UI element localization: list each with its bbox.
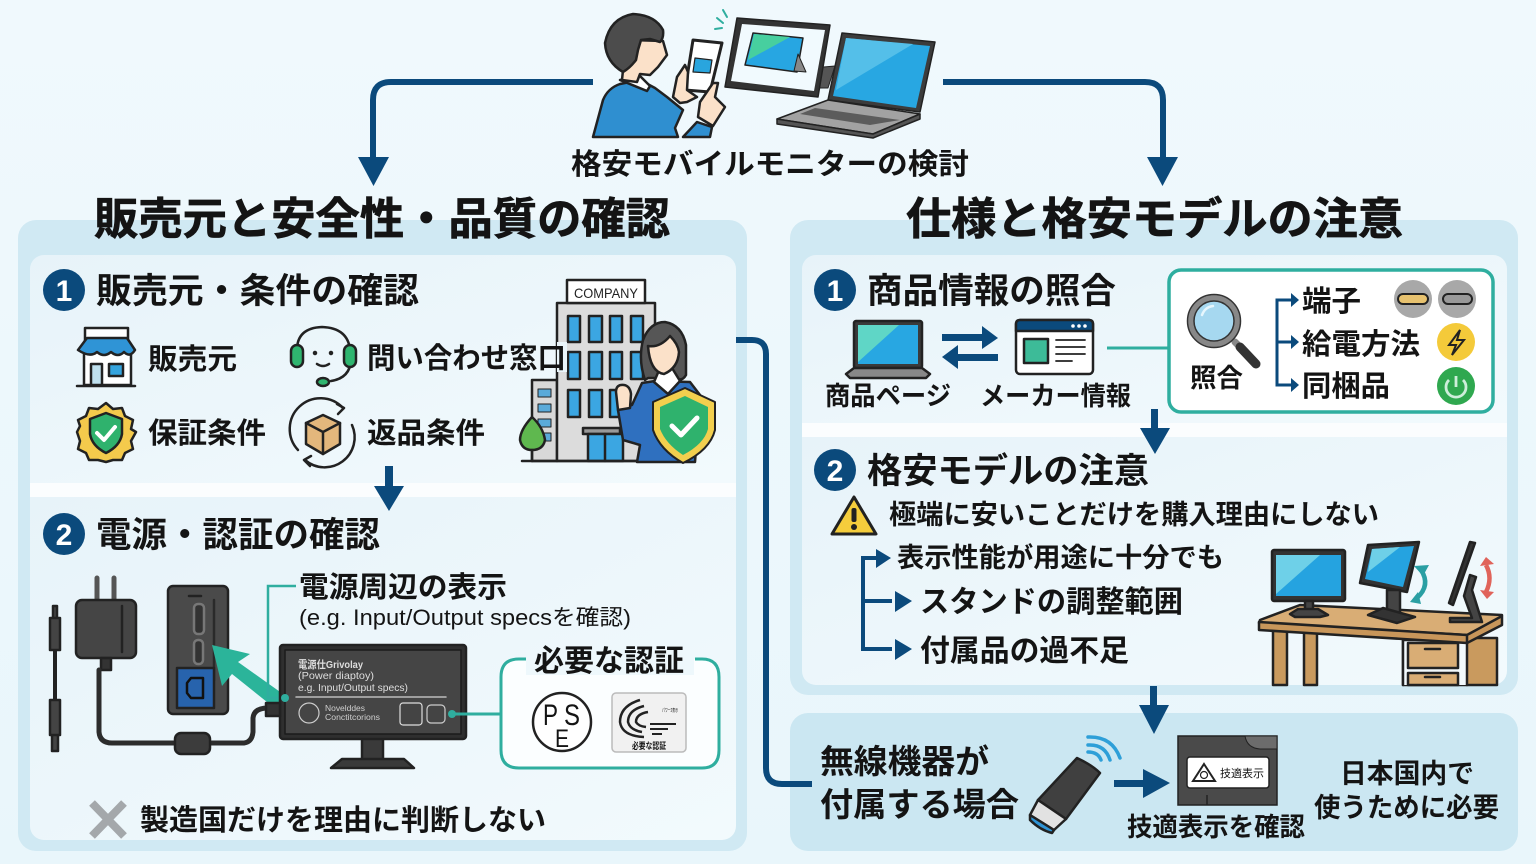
leader: power label: [268, 586, 296, 698]
badge: right 1: [814, 269, 856, 311]
label: product page: 商品ページ: [825, 381, 951, 411]
label: power method: 給電方法: [1302, 328, 1420, 361]
icon: warning: [832, 497, 876, 534]
monitor label text: Novelddes: [325, 703, 365, 713]
label: check: 照合: [1190, 363, 1243, 393]
panel: left outer: [18, 220, 747, 851]
label: 問い合わせ窓口: 問い合わせ窓口: [367, 342, 566, 375]
illustration: desk with monitors: [1259, 542, 1502, 685]
icon: PSE mark: [533, 693, 591, 753]
heading: left section: 販売元と安全性・品質の確認: [94, 195, 670, 244]
icon: cross mark: [92, 803, 124, 836]
monitor label text: e.g. Input/Output specs): [298, 682, 408, 694]
icon: giteki label: 技適表示: [1220, 766, 1264, 780]
panel: right step 1: [802, 255, 1507, 423]
illustration: company building: [520, 280, 655, 461]
icon: USB-C port: [1438, 280, 1476, 318]
heading: left step 1: 販売元・条件の確認: [96, 272, 419, 311]
label: power display: 電源周辺の表示: [299, 571, 507, 604]
heading: right step 2: 格安モデルの注意: [867, 451, 1149, 491]
label: with wireless: [820, 743, 1019, 823]
label: with wireless: 付属する場合: [820, 786, 1019, 823]
note: manufacturing country: 製造国だけを理由に判断しない: [140, 804, 546, 837]
illustration: monitor ports: [168, 586, 228, 714]
arrow: right step 1 to 2: [1140, 409, 1170, 454]
label: with wireless: 無線機器が: [820, 743, 989, 780]
panel: wireless devices: [790, 713, 1518, 851]
panel: right outer: [790, 220, 1518, 695]
arrow: left step 1 to 2: [374, 466, 404, 511]
badge: left 2: 2: [56, 519, 72, 552]
badge: left 2: [43, 513, 85, 555]
icon: PSE mark: S: [564, 699, 580, 732]
heading: certification: 必要な認証: [534, 645, 684, 678]
icon: returns box: [290, 398, 355, 467]
note: accessories: 付属品の過不足: [920, 635, 1129, 668]
icon: shop: [77, 328, 135, 386]
note: cheap warning: 極端に安いことだけを購入理由にしない: [889, 500, 1379, 530]
badge: left 1: 1: [56, 275, 72, 308]
icon: lightning: [1437, 323, 1475, 361]
icon: wifi dongle: [1030, 737, 1120, 833]
icon: maker web page: [1016, 320, 1093, 374]
panel: right step 2: [802, 437, 1507, 685]
label: necessary in Japan: 日本国内で: [1340, 759, 1474, 789]
panel: left step 2: [30, 497, 736, 840]
monitor label text: (Power diaptoy): [298, 670, 374, 682]
icon: power: [1437, 367, 1475, 405]
icon: certification mark: [612, 693, 686, 752]
badge: right 2: [814, 449, 856, 491]
arrow: monitor label to port: [212, 645, 283, 710]
label: bundled: 同梱品: [1302, 370, 1390, 403]
divider: left: [30, 483, 736, 497]
icon: laptop: [846, 321, 930, 378]
divider: right: [802, 423, 1507, 437]
badge: right 2: 2: [827, 455, 843, 488]
label: necessary in Japan: 使うために必要: [1314, 793, 1499, 823]
top caption: 格安モバイルモニターの検討: [571, 148, 969, 181]
illustration: person with phone: [593, 10, 727, 137]
monitor label text: Conctitcorions: [325, 712, 380, 722]
illustration: laptop: [777, 33, 935, 138]
label: 保証条件: 保証条件: [148, 417, 266, 450]
icon: PSE mark: P: [543, 699, 558, 732]
heading: right section: 仕様と格安モデルの注意: [906, 195, 1403, 244]
heading: right step 1: 商品情報の照合: [867, 272, 1116, 311]
label: 販売元: 販売元: [148, 343, 237, 376]
label: necessary in Japan: [1314, 759, 1499, 823]
arrow: top to left: [358, 82, 593, 186]
panel: certification: [452, 650, 719, 768]
arrow: tilt teal: [1410, 565, 1429, 604]
label: maker info: メーカー情報: [980, 381, 1131, 411]
bracket arrows: [1277, 293, 1299, 392]
label: spec note: (e.g. Input/Output specsを確認): [299, 605, 631, 630]
illustration: businesswoman with shield: [616, 322, 715, 463]
icon: support headset: [291, 327, 356, 386]
bracket arrows: notes: [863, 549, 912, 660]
connector: to check box: [1107, 346, 1169, 350]
arrow: top to right: [943, 82, 1178, 186]
label: terminal: 端子: [1302, 285, 1361, 318]
panel: check box: [1169, 270, 1493, 412]
note: stand range: スタンドの調整範囲: [920, 586, 1183, 619]
icon: warranty badge: [77, 403, 136, 462]
illustration: company building: COMPANY: [574, 285, 639, 301]
arrows: page and maker: [942, 326, 998, 369]
icon: giteki label: [1178, 736, 1277, 805]
monitor label text: [298, 658, 408, 722]
panel: left step 1: [30, 255, 736, 483]
arrow: right to wireless: [1139, 686, 1169, 734]
leader dots: [281, 694, 456, 718]
illustration: monitor back: [266, 645, 466, 768]
connector: left panel to wireless: [736, 340, 812, 784]
badge: right 1: 1: [827, 275, 843, 308]
note: display performance: 表示性能が用途に十分でも: [897, 542, 1224, 573]
icon: HDMI port: [1394, 280, 1432, 318]
badge: left 1: [43, 269, 85, 311]
arrow: tilt red: [1480, 557, 1494, 599]
illustration: mobile monitor: [725, 18, 835, 97]
icon: certification mark: パワー2表示: [662, 707, 678, 714]
icon: magnifier: [1188, 294, 1256, 364]
label: 返品条件: 返品条件: [367, 417, 485, 450]
illustration: power adapter and cable: [50, 578, 280, 754]
arrow: dongle to mark: [1114, 769, 1170, 798]
heading: left step 2: 電源・認証の確認: [96, 516, 380, 555]
icon: PSE mark: E: [555, 725, 569, 753]
label: check giteki: 技適表示を確認: [1127, 812, 1305, 842]
label backing: [557, 342, 567, 372]
monitor label text: 電源仕Grivolay: [298, 658, 363, 671]
icon: certification mark: 必要な認証: [632, 740, 666, 751]
